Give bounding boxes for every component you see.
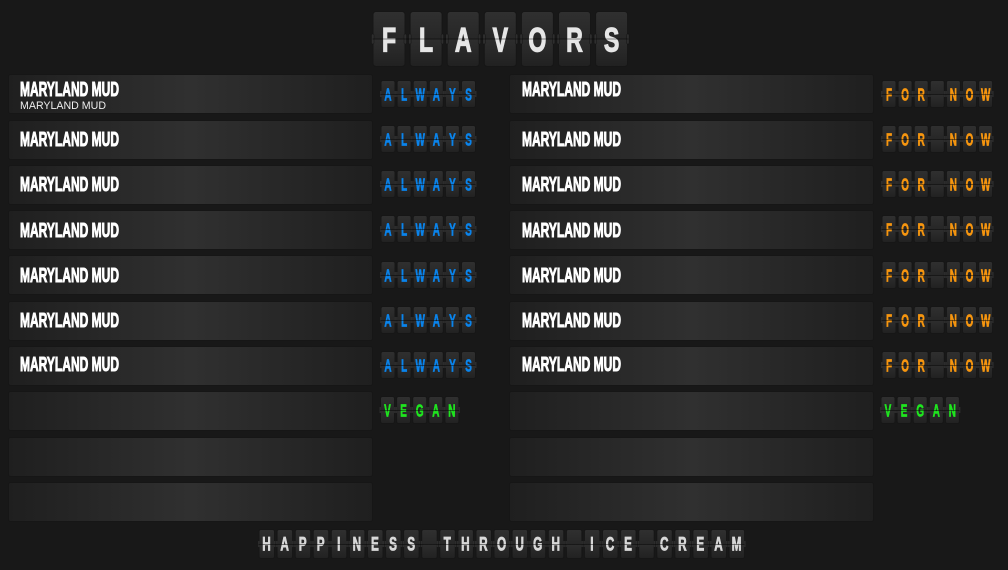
tiles: ALWAYS row 2: ALWAYS bbox=[384, 131, 472, 150]
tiles: ALWAYS row 1: ALWAYS bbox=[384, 86, 472, 105]
title: FLAVORS flip tiles bbox=[372, 12, 629, 66]
panel: right row 7 bbox=[510, 346, 874, 386]
tiles: ALWAYS row 3: ALWAYS bbox=[384, 176, 472, 195]
footer tagline flip tiles bbox=[258, 530, 746, 558]
panel: left row 7 bbox=[8, 346, 372, 386]
tiles: VEGAN right bbox=[880, 396, 960, 424]
flavor name and subtitle bbox=[20, 79, 119, 112]
panel: right row 1: MARYLAND MUD bbox=[522, 79, 621, 101]
tiles: ALWAYS row 4: ALWAYS bbox=[384, 221, 472, 240]
panel: left row 5 bbox=[8, 256, 372, 294]
tiles: FOR NOW row 2: FOR NOW bbox=[886, 131, 990, 150]
footer tagline flip tiles: HAPPINESS THROUGH ICE CREAM bbox=[262, 535, 741, 555]
tiles: FOR NOW row 5 bbox=[881, 262, 994, 288]
tiles: FOR NOW row 2 bbox=[881, 126, 994, 152]
tiles: ALWAYS row 7: ALWAYS bbox=[384, 357, 472, 376]
panel: right row 9 bbox=[510, 438, 874, 476]
tiles: ALWAYS row 7 bbox=[380, 352, 476, 378]
tiles: FOR NOW row 4: FOR NOW bbox=[886, 221, 990, 240]
tiles: ALWAYS row 4 bbox=[380, 216, 476, 242]
panel: left row 1 bbox=[8, 74, 372, 114]
flavor name and subtitle: MARYLAND MUD bbox=[20, 100, 106, 112]
tiles: VEGAN left: VEGAN bbox=[384, 402, 455, 421]
tiles: FOR NOW row 7 bbox=[881, 352, 994, 378]
panel: right row 10 bbox=[510, 482, 874, 522]
tiles: ALWAYS row 5 bbox=[380, 262, 476, 288]
panel: left row 4 bbox=[8, 210, 372, 250]
panel: left row 5: MARYLAND MUD bbox=[20, 265, 119, 287]
tiles: FOR NOW row 6 bbox=[881, 306, 994, 334]
panel: right row 3: MARYLAND MUD bbox=[522, 174, 621, 196]
panel: right row 2 bbox=[510, 120, 874, 160]
tiles: ALWAYS row 5: ALWAYS bbox=[384, 267, 472, 286]
panel: left row 2 bbox=[8, 120, 372, 160]
tiles: ALWAYS row 1 bbox=[380, 80, 476, 108]
panel: right row 7: MARYLAND MUD bbox=[522, 354, 621, 376]
tiles: ALWAYS row 6 bbox=[380, 306, 476, 334]
title: FLAVORS flip tiles: FLAVORS bbox=[382, 22, 619, 60]
panel: left row 9 bbox=[8, 438, 372, 476]
tiles: VEGAN right: VEGAN bbox=[885, 402, 956, 421]
panel: left row 4: MARYLAND MUD bbox=[20, 220, 119, 242]
panel: right row 5: MARYLAND MUD bbox=[522, 265, 621, 287]
panel: right row 8 bbox=[510, 392, 874, 430]
panel: right row 4 bbox=[510, 210, 874, 250]
tiles: FOR NOW row 1 bbox=[881, 80, 994, 108]
panel: left row 8 bbox=[8, 392, 372, 430]
panel: left row 6: MARYLAND MUD bbox=[20, 310, 119, 332]
panel: right row 4: MARYLAND MUD bbox=[522, 220, 621, 242]
flavor name and subtitle: MARYLAND MUD bbox=[20, 79, 119, 101]
tiles: ALWAYS row 6: ALWAYS bbox=[384, 312, 472, 331]
tiles: FOR NOW row 3 bbox=[881, 170, 994, 198]
panel: right row 5 bbox=[510, 256, 874, 294]
panel: left row 10 bbox=[8, 482, 372, 522]
panel: right row 1 bbox=[510, 74, 874, 114]
panel: right row 6 bbox=[510, 302, 874, 340]
panel: left row 3: MARYLAND MUD bbox=[20, 174, 119, 196]
tiles: FOR NOW row 7: FOR NOW bbox=[886, 357, 990, 376]
panel: left row 3 bbox=[8, 166, 372, 204]
panel: left row 6 bbox=[8, 302, 372, 340]
tiles: ALWAYS row 2 bbox=[380, 126, 476, 152]
panel: left row 7: MARYLAND MUD bbox=[20, 354, 119, 376]
tiles: FOR NOW row 4 bbox=[881, 216, 994, 242]
tiles: FOR NOW row 6: FOR NOW bbox=[886, 312, 990, 331]
panel: right row 6: MARYLAND MUD bbox=[522, 310, 621, 332]
tiles: FOR NOW row 5: FOR NOW bbox=[886, 267, 990, 286]
panel: right row 2: MARYLAND MUD bbox=[522, 129, 621, 151]
panel: right row 3 bbox=[510, 166, 874, 204]
tiles: VEGAN left bbox=[380, 396, 460, 424]
tiles: FOR NOW row 1: FOR NOW bbox=[886, 86, 990, 105]
panel: left row 2: MARYLAND MUD bbox=[20, 129, 119, 151]
tiles: FOR NOW row 3: FOR NOW bbox=[886, 176, 990, 195]
tiles: ALWAYS row 3 bbox=[380, 170, 476, 198]
